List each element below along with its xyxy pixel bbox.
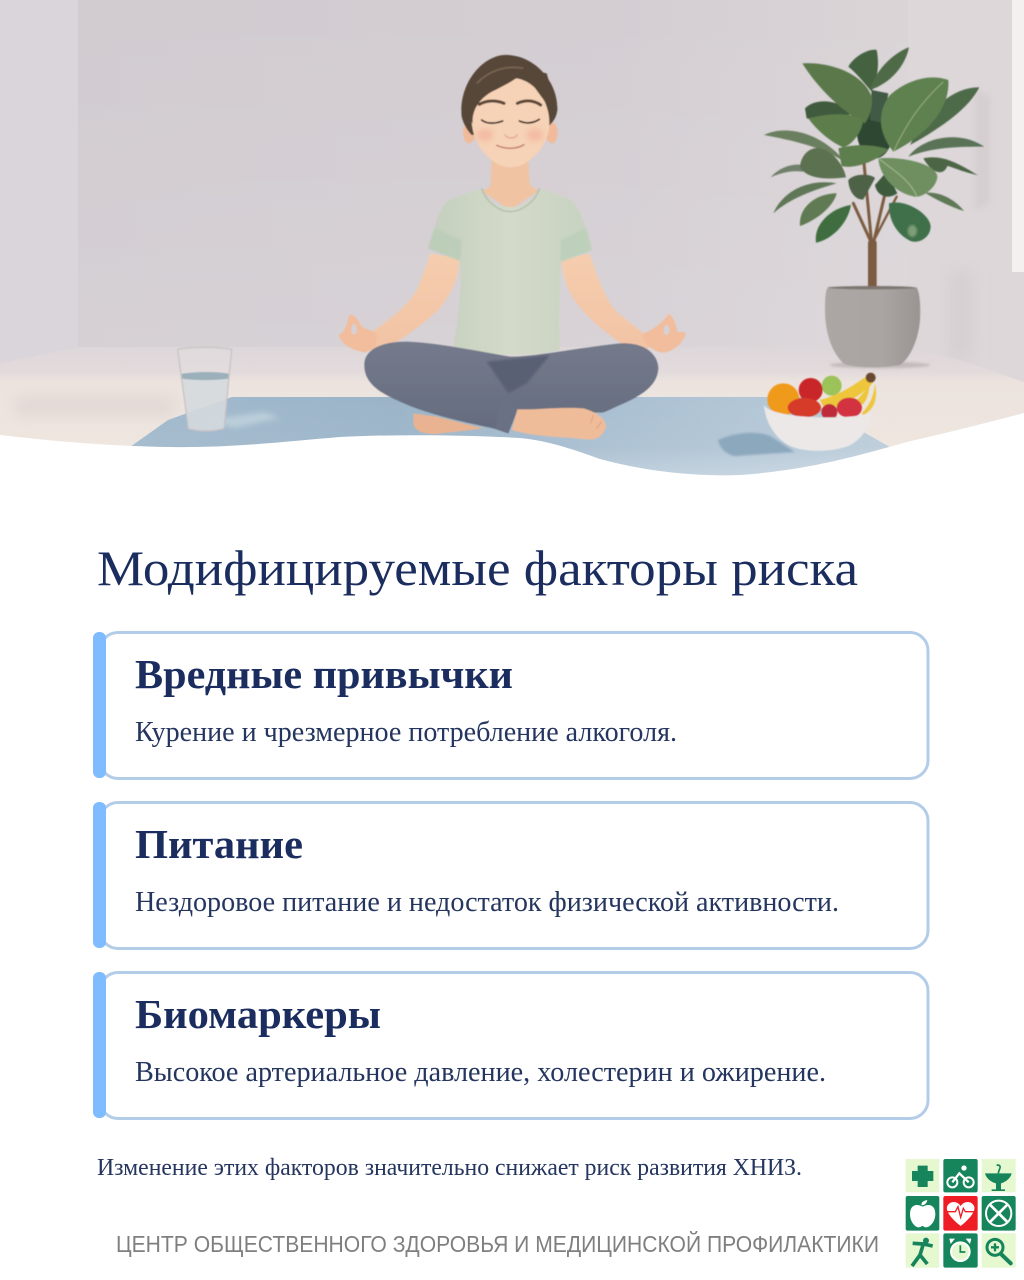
bananas bbox=[820, 375, 876, 415]
card accent bar bbox=[93, 802, 106, 948]
meditating woman bbox=[338, 55, 686, 440]
green apple bbox=[822, 376, 842, 396]
organisation name: ЦЕНТР ОБЩЕСТВЕННОГО ЗДОРОВЬЯ И МЕДИЦИНСКОЙ ПРОФИЛАКТИКИ bbox=[116, 1230, 879, 1257]
icon: alarm clock bbox=[943, 1233, 978, 1268]
nose and smile bbox=[497, 135, 524, 148]
floor bbox=[0, 347, 1024, 480]
summary note: Изменение этих факторов значительно снижает риск развития ХНИЗ. bbox=[97, 1155, 802, 1181]
card: Биомаркеры bbox=[93, 972, 928, 1118]
front hair bbox=[463, 60, 557, 124]
card text: Высокое артериальное давление, холестерин и ожирение. bbox=[135, 1057, 826, 1088]
icon: magnifier with cross bbox=[982, 1233, 1016, 1268]
mat front light bbox=[130, 397, 895, 480]
icon: cyclist bbox=[943, 1159, 978, 1192]
left foot bbox=[413, 413, 483, 434]
left hand bbox=[338, 315, 377, 353]
orange bbox=[767, 383, 799, 415]
card accent bar bbox=[93, 632, 106, 778]
potted plant bbox=[764, 47, 990, 368]
yoga mat bbox=[130, 397, 895, 480]
card accent bar bbox=[93, 972, 106, 1118]
card heading: Биомаркеры bbox=[135, 991, 381, 1037]
strawberry bbox=[799, 378, 823, 402]
neck bbox=[480, 157, 540, 210]
background room scene bbox=[0, 0, 1024, 480]
back leaves bbox=[764, 47, 984, 199]
card text: Курение и чрезмерное потребление алкоголя. bbox=[135, 717, 677, 748]
face bbox=[472, 78, 549, 167]
icon: heart with pulse bbox=[943, 1196, 978, 1231]
card: Питание bbox=[93, 802, 928, 948]
strawberry front bbox=[837, 398, 862, 418]
card heading: Вредные привычки bbox=[135, 651, 513, 697]
raspberry bbox=[821, 404, 837, 420]
icon: no smoking bbox=[982, 1196, 1016, 1231]
white wave divider bbox=[0, 413, 1024, 520]
cheeks bbox=[477, 129, 543, 141]
back hair bbox=[461, 55, 557, 135]
bowl shadow on mat bbox=[718, 433, 795, 456]
icon: runner bbox=[906, 1233, 939, 1268]
mat light patch bbox=[205, 412, 280, 428]
left wall bbox=[0, 0, 78, 363]
ears bbox=[463, 122, 558, 143]
plant shadow on wall bbox=[975, 90, 990, 210]
pot bbox=[825, 286, 920, 367]
legs bbox=[364, 342, 658, 433]
pot shadow bbox=[830, 362, 930, 368]
card text: Нездоровое питание и недостаток физической активности. bbox=[135, 887, 839, 918]
icon: medical cross bbox=[906, 1159, 939, 1192]
trunk and branches bbox=[853, 163, 897, 288]
right foot bbox=[512, 408, 606, 440]
title: Модифицируемые факторы риска bbox=[97, 540, 858, 596]
right wall bbox=[908, 0, 1024, 382]
right hand bbox=[642, 314, 686, 353]
arms bbox=[363, 253, 655, 355]
logo icon grid bbox=[906, 1159, 1016, 1268]
card heading: Питание bbox=[135, 821, 303, 867]
floor shadow band bbox=[15, 396, 175, 416]
fruit bowl bbox=[764, 373, 876, 451]
glass of water bbox=[178, 347, 232, 431]
eyebrows bbox=[479, 101, 541, 105]
icon: bowl of hygieia bbox=[982, 1159, 1016, 1192]
card: Вредные привычки bbox=[93, 632, 928, 778]
wall shadow bbox=[950, 270, 972, 360]
bowl bbox=[764, 405, 872, 451]
shirt bbox=[428, 188, 592, 355]
icon: apple bbox=[906, 1196, 939, 1231]
tomato bbox=[788, 398, 821, 417]
front leaves bbox=[773, 63, 964, 243]
closed eyes bbox=[482, 119, 539, 123]
window light bbox=[1012, 0, 1024, 272]
